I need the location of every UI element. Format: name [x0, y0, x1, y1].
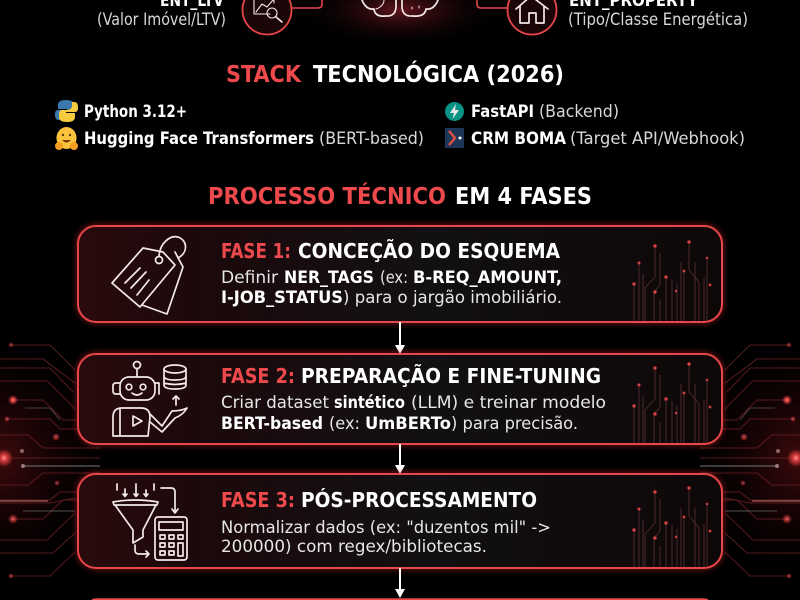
- text: fase 2 body: BERT-based: [221, 414, 323, 433]
- icon: python: [55, 100, 78, 122]
- icon: robot and database: [113, 362, 187, 436]
- connector: right: [477, 0, 507, 8]
- heading: process: EM 4 FASES: [455, 184, 592, 210]
- icon: chart with magnifier: [242, 0, 292, 34]
- heading: stack: TECNOLÓGICA (2026): [313, 60, 564, 88]
- icon: fastapi: [445, 102, 464, 121]
- icon: brain: [362, 0, 438, 16]
- text: fase 1 body: (ex:: [380, 268, 408, 287]
- icon: house: [508, 0, 556, 34]
- text: fase 1 body: B-REQ_AMOUNT,: [413, 268, 562, 287]
- text: Hugging Face: (BERT-based): [319, 129, 424, 149]
- text: Python: Python 3.12+: [84, 102, 187, 122]
- circuit decoration: [632, 486, 712, 567]
- circuit pattern: left: [0, 342, 100, 579]
- text: fase 2 body: Criar dataset: [221, 393, 330, 412]
- arrow 2: [395, 444, 405, 474]
- heading: stack: STACK: [226, 62, 302, 88]
- text: fase 1 body: Definir: [221, 268, 278, 287]
- panel: fase 4 top edge: [92, 599, 708, 600]
- text: fase 1 heading: FASE 1:: [221, 239, 291, 263]
- icon: crm: [445, 128, 464, 148]
- text: Valor Imóvel/LTV: (Valor Imóvel/LTV): [97, 10, 226, 30]
- top diagram: [97, 0, 748, 34]
- text: fase 3 body: Normalizar dados (ex: "duzentos mil" ->: [221, 518, 551, 537]
- circuit decoration: [632, 362, 712, 443]
- text: Tipo/Classe Energética: (Tipo/Classe Energética): [568, 10, 748, 30]
- text: fase 1 body: ) para o jargão imobiliário.: [343, 288, 562, 307]
- text: fase 1 heading: CONCEÇÃO DO ESQUEMA: [298, 239, 560, 263]
- text: fase 2 body: (LLM) e treinar modelo: [411, 393, 606, 412]
- icon: tags: [112, 237, 186, 314]
- text: fase 3 body: 200000) com regex/bibliotecas.: [221, 537, 487, 556]
- panel: fase 1: [78, 226, 722, 322]
- text: CRM BOMA: CRM BOMA: [471, 129, 567, 149]
- text: FastAPI: [471, 102, 619, 122]
- text: fase 2 heading: FASE 2:: [221, 364, 295, 388]
- circuit decoration: [632, 240, 712, 321]
- text: fase 1 body: [221, 268, 562, 307]
- text: CRM BOMA: (Target API/Webhook): [570, 129, 745, 149]
- arrow 1: [395, 322, 405, 354]
- heading: process: PROCESSO TÉCNICO: [208, 182, 446, 210]
- text: fase 3 heading: FASE 3:: [221, 488, 295, 512]
- text: fase 2 body: (ex:: [329, 414, 360, 433]
- icon: hugging face: [55, 127, 78, 150]
- heading: stack: [226, 60, 564, 88]
- text: fase 2 body: [221, 393, 606, 433]
- heading: process: [208, 182, 592, 210]
- icon: funnel and calculator: [113, 484, 187, 560]
- text: fase 2 body: sintético: [334, 393, 405, 412]
- text: FastAPI: (Backend): [539, 102, 619, 122]
- stack list: [55, 100, 745, 150]
- text: CRM BOMA: [471, 129, 745, 149]
- connector: left: [292, 0, 322, 8]
- panel: fase 2: [78, 354, 722, 444]
- text: fase 3 heading: PÓS-PROCESSAMENTO: [301, 488, 537, 512]
- text: Hugging Face: Hugging Face Transformers: [84, 129, 314, 149]
- text: fase 2 body: UmBERTo: [365, 414, 451, 433]
- panel: fase 3: [78, 474, 722, 568]
- text: fase 1 body: I-JOB_STATUS: [221, 288, 343, 307]
- text: FastAPI: FastAPI: [471, 102, 534, 122]
- arrow 3: [395, 568, 405, 598]
- text: fase 2 body: ) para precisão.: [451, 414, 578, 433]
- circuit pattern: right: [700, 342, 800, 579]
- text: fase 1 body: NER_TAGS: [284, 268, 374, 287]
- text: fase 2 heading: PREPARAÇÃO E FINE-TUNING: [301, 364, 601, 388]
- text: fase 3 body: [221, 518, 551, 556]
